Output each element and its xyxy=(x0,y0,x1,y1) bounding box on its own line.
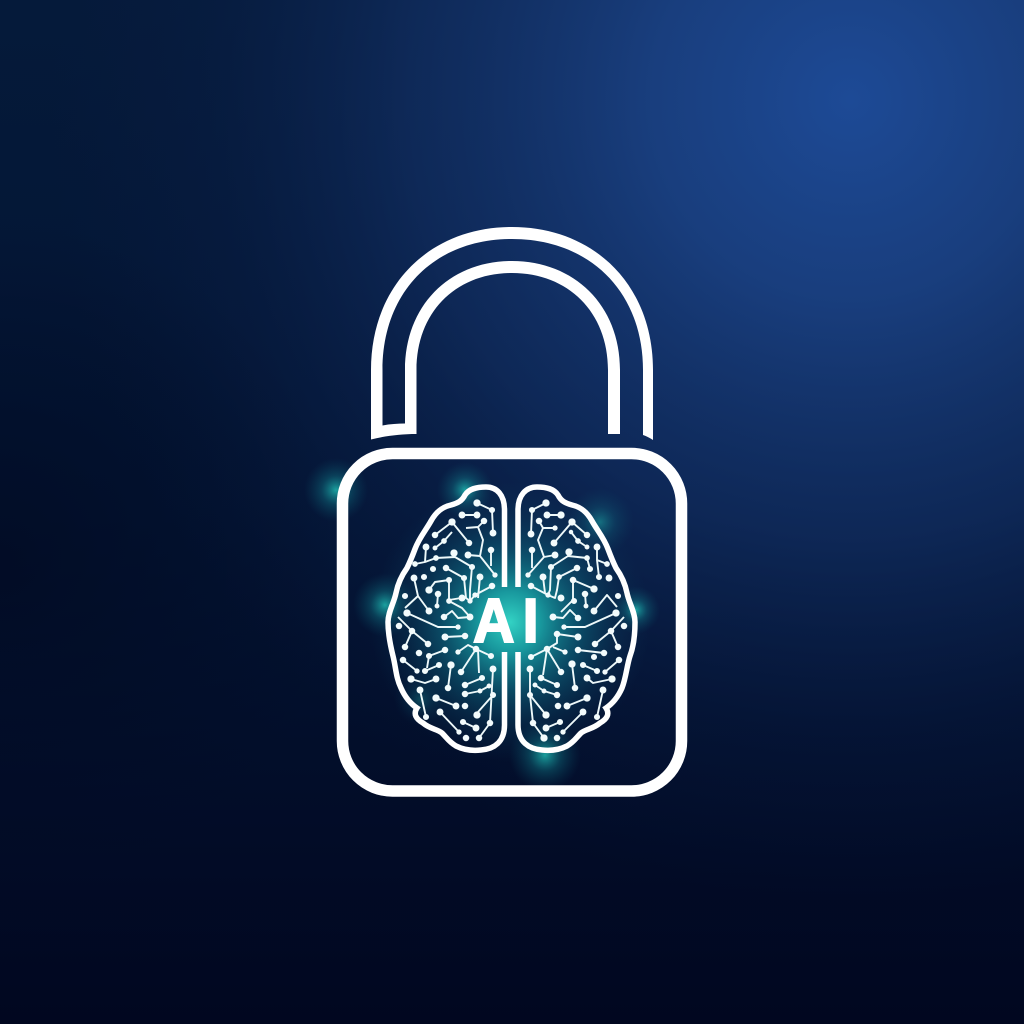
right circuit nodes xyxy=(526,500,627,741)
AI label: I xyxy=(523,586,539,656)
teal glow behind brain xyxy=(304,458,660,791)
AI label: A xyxy=(473,586,515,656)
padlock body xyxy=(342,454,682,791)
left circuit traces xyxy=(398,503,495,738)
right hemisphere outline xyxy=(518,487,635,750)
brain xyxy=(388,487,635,750)
right circuit traces xyxy=(528,503,624,738)
left hemisphere outline xyxy=(388,487,504,750)
left circuit nodes xyxy=(396,500,497,741)
padlock shackle xyxy=(371,227,653,440)
